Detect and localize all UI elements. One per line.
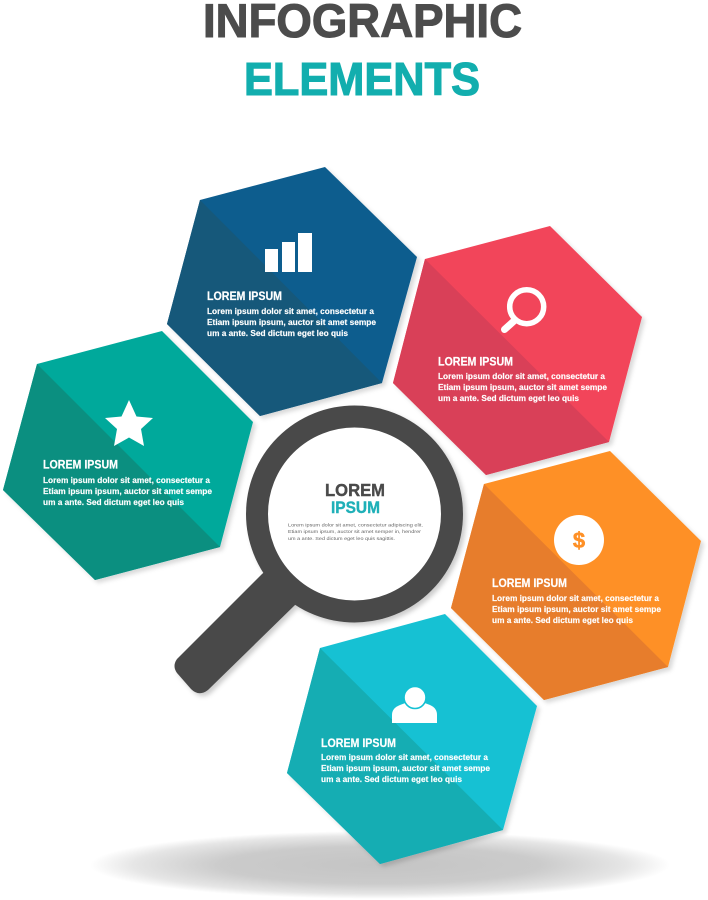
orange panel text [492, 578, 661, 625]
center label: LOREM [325, 480, 385, 500]
ground shadow [90, 831, 670, 899]
center label: Etiam ipsum ipsum, auctor sit amet semper in, hendrer [288, 529, 422, 534]
panel: teal hexagon [3, 331, 253, 580]
title: ELEMENTS [244, 53, 480, 105]
center label: um a ante. Sed dictum eget leo quis sagittis. [288, 536, 395, 541]
center label: IPSUM [331, 498, 380, 517]
navy panel text: um a ante. Sed dictum eget leo quis [207, 329, 348, 338]
teal panel text: Lorem ipsum dolor sit amet, consectetur a [43, 476, 210, 485]
orange panel text: Lorem ipsum dolor sit amet, consectetur a [492, 594, 659, 603]
icon: star [105, 400, 153, 446]
navy panel text: Lorem ipsum dolor sit amet, consectetur a [207, 307, 374, 316]
icon: person [392, 686, 437, 723]
cyan panel text [321, 738, 490, 784]
navy panel text: Etiam ipsum ipsum, auctor sit amet sempe [207, 318, 376, 327]
cyan panel text: Etiam ipsum ipsum, auctor sit amet sempe [321, 764, 490, 773]
panel: orange hexagon [451, 451, 701, 700]
red panel text: Etiam ipsum ipsum, auctor sit amet sempe [438, 383, 607, 392]
teal panel text [43, 460, 212, 507]
panel: cyan hexagon [287, 614, 537, 864]
orange panel text: LOREM IPSUM [492, 578, 567, 590]
title [203, 0, 522, 105]
icon: bar chart [265, 233, 312, 272]
teal panel text: LOREM IPSUM [43, 460, 118, 472]
navy panel text [207, 291, 376, 338]
cyan panel text: LOREM IPSUM [321, 738, 396, 750]
orange panel text: um a ante. Sed dictum eget leo quis [492, 616, 633, 625]
cyan panel text: Lorem ipsum dolor sit amet, consectetur a [321, 753, 488, 762]
icon: dollar coin: $ [573, 528, 585, 553]
red panel text: Lorem ipsum dolor sit amet, consectetur a [438, 372, 605, 381]
panel: navy hexagon [167, 167, 417, 416]
center label: Lorem ipsum dolor sit amet, consectetur adipiscing elit. [288, 522, 423, 528]
icon: dollar coin [554, 515, 604, 565]
navy panel text: LOREM IPSUM [207, 291, 282, 303]
red panel text [438, 356, 607, 403]
icon: magnifier [504, 290, 544, 330]
center label [288, 480, 423, 541]
orange panel text: Etiam ipsum ipsum, auctor sit amet sempe [492, 605, 661, 614]
panel: red hexagon [393, 226, 642, 475]
magnifying glass [174, 416, 452, 693]
teal panel text: um a ante. Sed dictum eget leo quis [43, 498, 184, 507]
cyan panel text: um a ante. Sed dictum eget leo quis [321, 775, 462, 784]
red panel text: LOREM IPSUM [438, 356, 513, 368]
teal panel text: Etiam ipsum ipsum, auctor sit amet sempe [43, 487, 212, 496]
red panel text: um a ante. Sed dictum eget leo quis [438, 394, 579, 403]
